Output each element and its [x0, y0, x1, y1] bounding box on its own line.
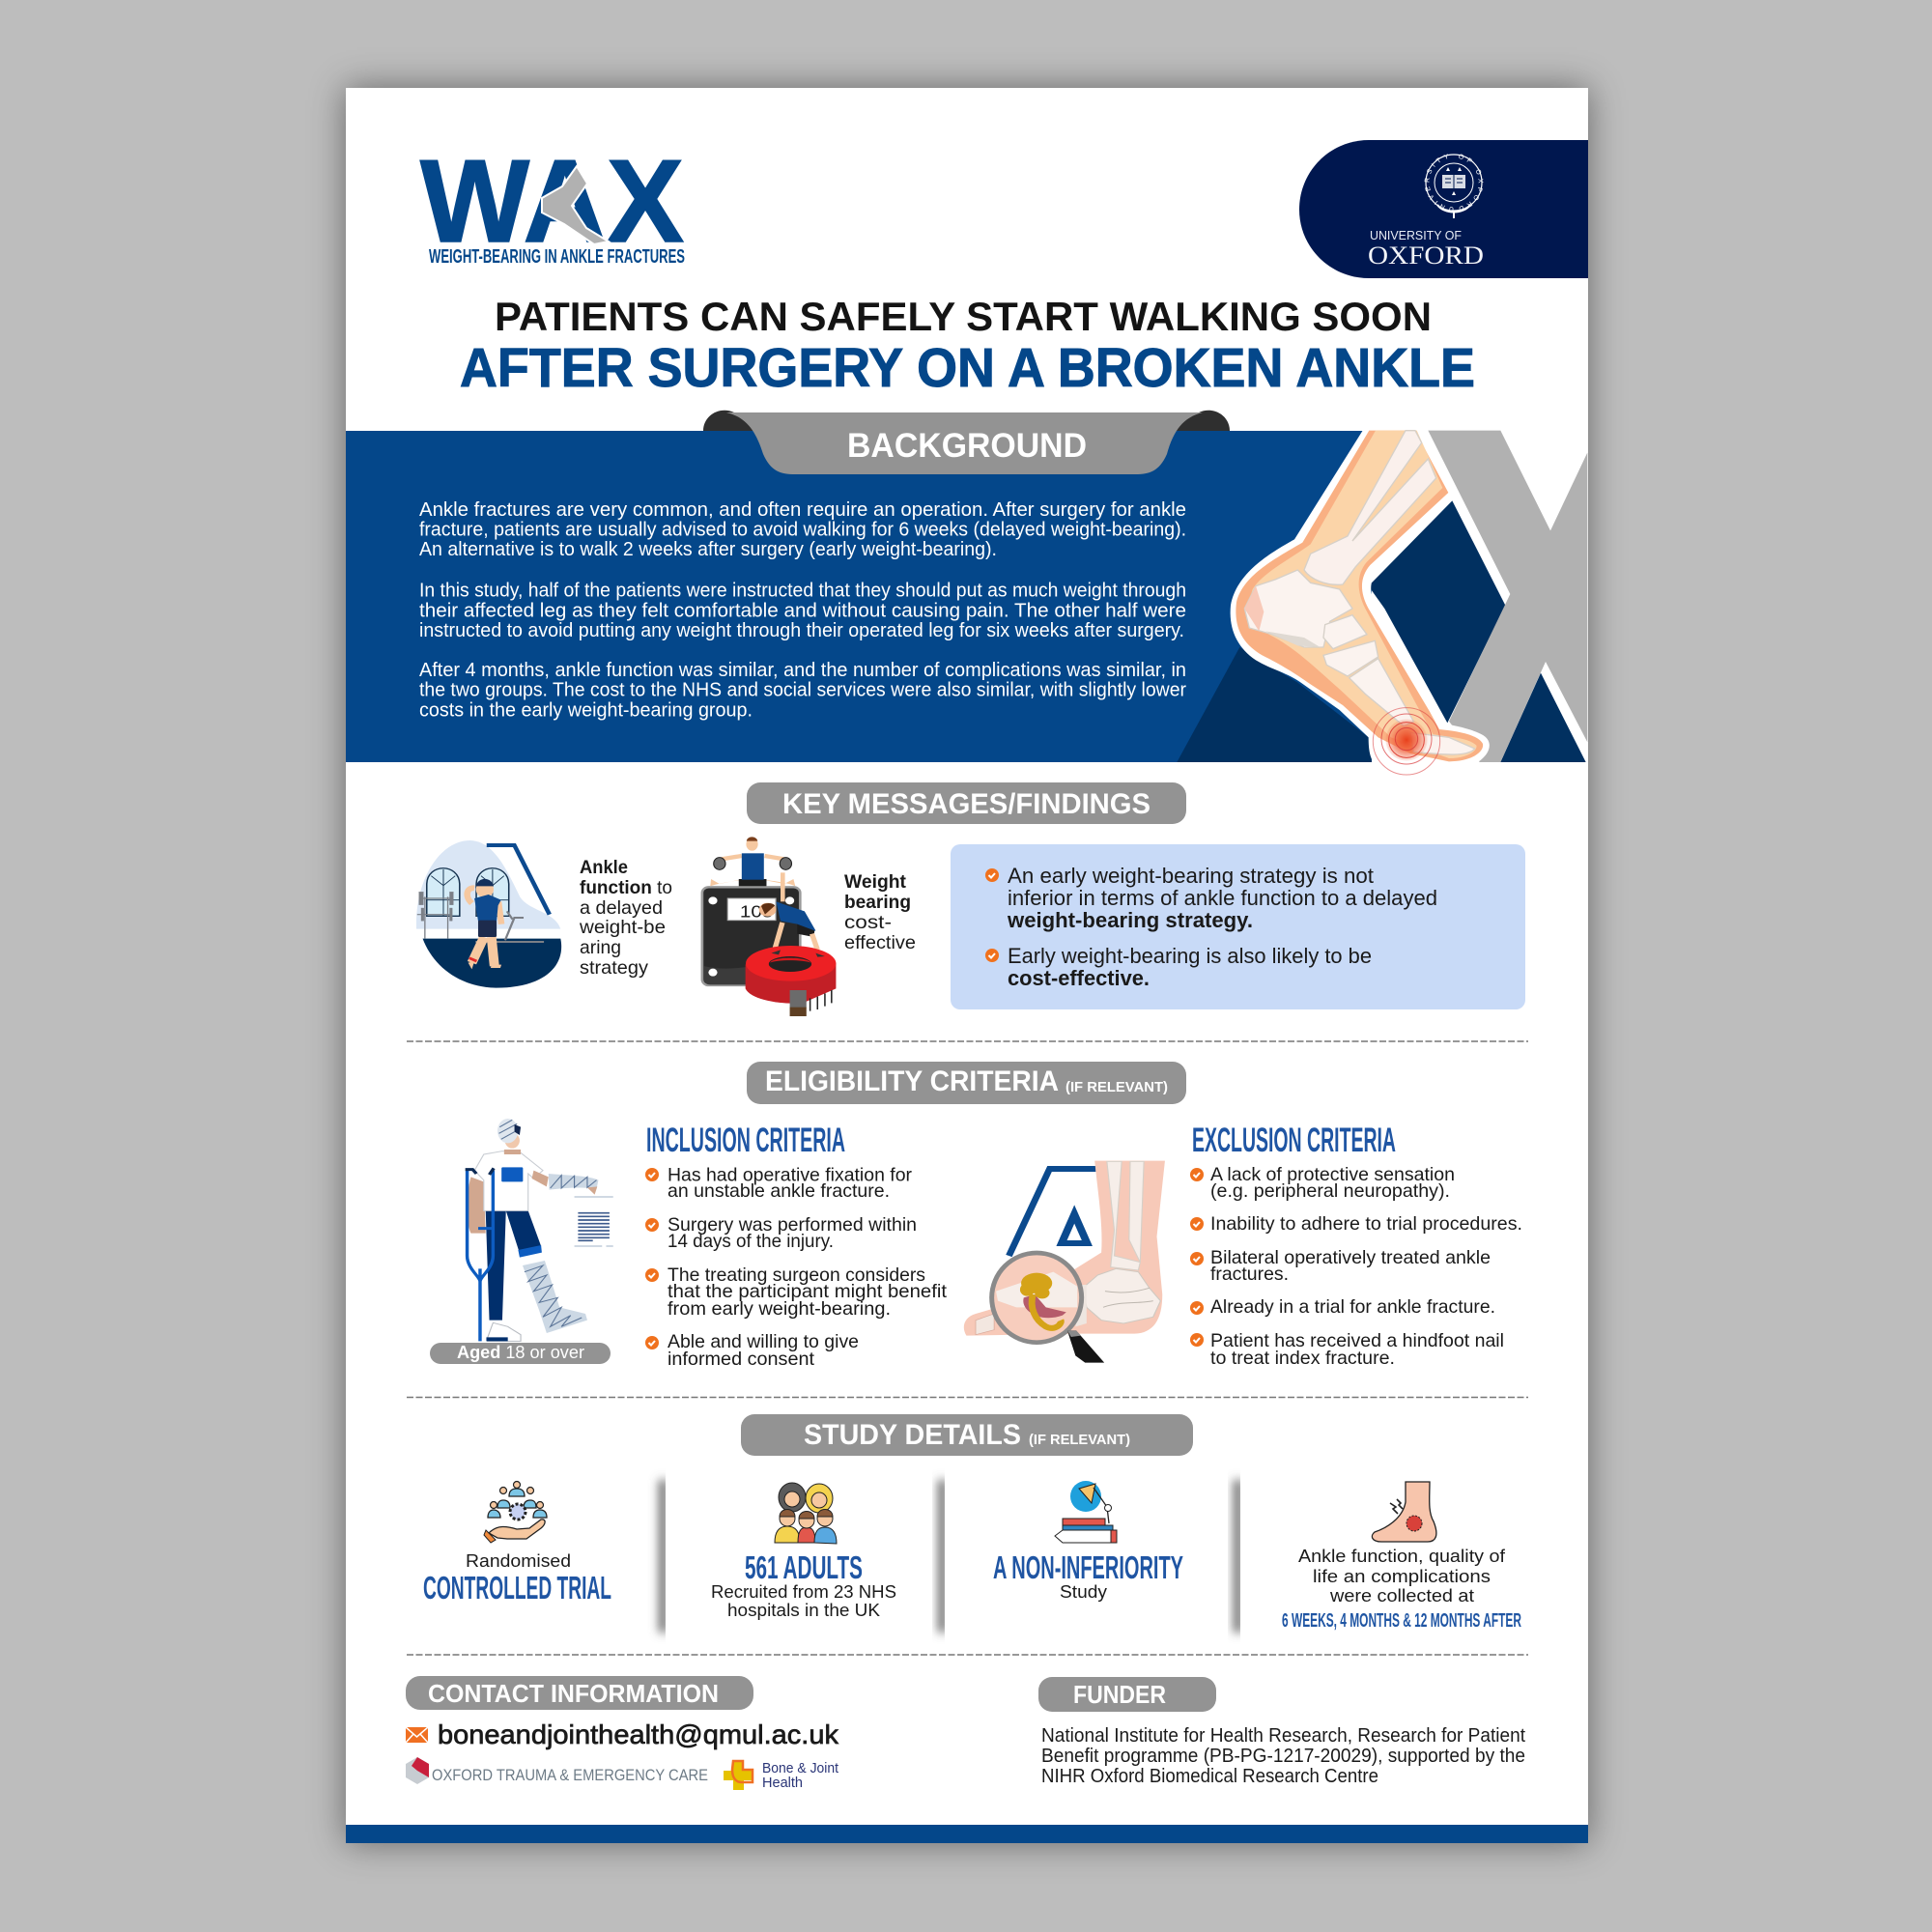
- text: email: boneandjointhealth@qmul.ac.uk: [438, 1719, 839, 1749]
- list: inclusion criteria: [645, 1165, 948, 1370]
- text: recruited: [711, 1582, 896, 1620]
- illustration: man in gym: [416, 840, 561, 988]
- blue band: [346, 431, 1372, 762]
- panel: key messages: [416, 782, 1525, 1016]
- label: aged 18 or over: Aged 18 or over: [457, 1342, 584, 1362]
- panel: study details: [423, 1414, 1530, 1652]
- list: exclusion criteria: [1190, 1164, 1522, 1369]
- list: exclusion criteria: Patient has received a hindfoot nail: [1210, 1330, 1504, 1351]
- foot inner tissue: [1250, 431, 1477, 758]
- title line 2: AFTER SURGERY ON A BROKEN ANKLE: [460, 337, 1475, 399]
- icon: foot bones: [542, 166, 609, 244]
- list: inclusion criteria: 14 days of the injury.: [668, 1231, 834, 1252]
- logo: Bone & Joint Health: [724, 1761, 838, 1791]
- logo: Oxford Trauma: OXFORD TRAUMA & EMERGENCY CARE: [432, 1766, 708, 1784]
- funder heading: FUNDER: [1073, 1680, 1166, 1709]
- list: exclusion criteria: fractures.: [1210, 1264, 1289, 1285]
- text: ankle function outcomes: were collected at: [1329, 1586, 1474, 1605]
- text: ankle function: [579, 857, 672, 979]
- text: a non-inferiority: A NON-INFERIORITY: [993, 1549, 1183, 1585]
- navy shapes: [1177, 500, 1586, 762]
- text: recruited: hospitals in the UK: [727, 1601, 880, 1620]
- illustration: scale and tape: [702, 837, 836, 1016]
- funder text: Benefit programme (PB-PG-1217-20029), supported by the: [1041, 1746, 1525, 1767]
- panel: funder: [1038, 1677, 1525, 1787]
- funder text: National Institute for Health Research, Research for Patient: [1041, 1725, 1525, 1747]
- list: exclusion criteria: A lack of protective sensation: [1210, 1164, 1455, 1185]
- foot white outline: [1231, 431, 1490, 762]
- finding 2: [1008, 944, 1372, 990]
- leg bones: [1304, 431, 1436, 584]
- callout: key findings: [951, 844, 1525, 1009]
- logo: Bone & Joint Health: Health: [762, 1776, 803, 1791]
- icon: group of adults: [775, 1483, 837, 1544]
- list: exclusion criteria: Bilateral operatively treated ankle: [1210, 1247, 1491, 1268]
- bullet icon: [985, 949, 999, 962]
- heading text: BACKGROUND: [847, 427, 1087, 465]
- finding 1: An early weight-bearing strategy is not: [1008, 864, 1375, 888]
- text: ankle function outcomes: Ankle function, quality of: [1298, 1547, 1506, 1566]
- list: exclusion criteria: Already in a trial for ankle fracture.: [1210, 1296, 1495, 1318]
- funder heading: [1038, 1677, 1216, 1712]
- logo letters: WAX: [420, 135, 684, 267]
- text: randomised: Randomised: [466, 1551, 571, 1571]
- list: inclusion criteria: The treating surgeon considers: [668, 1264, 925, 1286]
- contact heading: CONTACT INFORMATION: [428, 1679, 719, 1708]
- logo subtitle: WEIGHT-BEARING IN ANKLE FRACTURES: [429, 245, 685, 268]
- background text: costs in the early weight-bearing group.: [419, 699, 753, 721]
- University of Oxford badge: [1299, 140, 1588, 278]
- ribbon: background heading: [703, 411, 1230, 474]
- heading: inclusion criteria: INCLUSION CRITERIA: [646, 1122, 845, 1159]
- icon: books and lamp: [1055, 1481, 1117, 1543]
- finding 1: [1007, 864, 1437, 932]
- text: ankle function: aring: [580, 937, 621, 958]
- header logo: WAX: [420, 135, 685, 268]
- text: weight bearing: Weight: [844, 871, 906, 893]
- study details heading: (IF RELEVANT): [1029, 1432, 1130, 1448]
- text: ankle function: weight-be: [579, 917, 666, 938]
- pain rings: [1373, 708, 1440, 775]
- text: 561 adults: 561 ADULTS: [745, 1549, 863, 1585]
- text: ankle function outcomes: life an complications: [1313, 1567, 1491, 1586]
- background text: An alternative is to walk 2 weeks after surgery (early weight-bearing).: [419, 539, 997, 560]
- ribbon folds: [703, 411, 1230, 431]
- icon: Oxford seal: UNIVERSITY OF OXFORD: [1424, 154, 1484, 211]
- eligibility heading: ELIGIBILITY CRITERIA: [765, 1065, 1059, 1097]
- funder text: [1041, 1725, 1525, 1787]
- footer bar: [346, 1825, 1588, 1843]
- background text: instructed to avoid putting any weight through their operated leg for six weeks after surgery.: [419, 620, 1184, 641]
- logo: Oxford Trauma: [406, 1757, 708, 1784]
- finding 2: Early weight-bearing is also likely to be: [1008, 944, 1372, 968]
- text: weight bearing: [844, 871, 916, 953]
- background text: [419, 499, 1186, 721]
- text: ankle function outcomes: [1298, 1547, 1506, 1605]
- key messages heading: KEY MESSAGES/FINDINGS: [782, 788, 1151, 820]
- list: exclusion criteria: to treat index fracture.: [1210, 1348, 1395, 1369]
- column: participants: [711, 1483, 896, 1620]
- key messages heading: [747, 782, 1186, 824]
- list: exclusion criteria: Inability to adhere to trial procedures.: [1210, 1213, 1522, 1235]
- paper sheet: [346, 88, 1588, 1843]
- finding 1: weight-bearing strategy.: [1007, 908, 1253, 932]
- text: ankle function: a delayed: [580, 897, 663, 919]
- background text: In this study, half of the patients were instructed that they should put as much weight through: [419, 580, 1186, 601]
- panel: contact information: [406, 1676, 839, 1791]
- logo: Bone & Joint Health: Bone & Joint: [762, 1761, 838, 1776]
- list: inclusion criteria: informed consent: [668, 1349, 815, 1370]
- panel: background: [346, 411, 1587, 775]
- column: trial design: [423, 1482, 611, 1605]
- background text: fracture, patients are usually advised to avoid walking for 6 weeks (delayed weight-bearing).: [419, 520, 1186, 541]
- illustration: foot under magnifier: [964, 1161, 1165, 1363]
- text: controlled trial: CONTROLLED TRIAL: [423, 1570, 611, 1605]
- text: ankle function: strategy: [580, 957, 648, 979]
- foot outer tissue: [1236, 431, 1483, 761]
- eligibility heading: [747, 1062, 1186, 1104]
- study details heading: [741, 1414, 1193, 1456]
- finding 2: cost-effective.: [1008, 966, 1150, 990]
- background text: their affected leg as they felt comfortable and without causing pain. The other half were: [419, 601, 1186, 622]
- list: exclusion criteria: (e.g. peripheral neuropathy).: [1210, 1180, 1450, 1202]
- column: outcomes: [1282, 1482, 1521, 1632]
- ribbon body: [726, 412, 1203, 474]
- finding 1: inferior in terms of ankle function to a delayed: [1008, 886, 1437, 910]
- grey X: [1428, 431, 1587, 762]
- column: study type: [993, 1481, 1183, 1602]
- icon: team and gear: [484, 1482, 547, 1543]
- graphic: X shape and ankle: [1177, 431, 1587, 775]
- bullet icon: [985, 868, 999, 882]
- background text: After 4 months, ankle function was similar, and the number of complications was similar, in: [419, 660, 1186, 681]
- eligibility heading: (IF RELEVANT): [1065, 1079, 1168, 1095]
- list: inclusion criteria: from early weight-bearing.: [668, 1298, 891, 1320]
- title line 1: PATIENTS CAN SAFELY START WALKING SOON: [495, 294, 1432, 339]
- funder text: NIHR Oxford Biomedical Research Centre: [1041, 1766, 1378, 1787]
- badge background: [1299, 140, 1588, 278]
- background text: the two groups. The cost to the NHS and social services were also similar, with slightly lower: [419, 680, 1186, 701]
- text: ankle function: function to: [580, 877, 672, 898]
- title: [460, 294, 1475, 399]
- text: recruited: Recruited from 23 NHS: [711, 1582, 896, 1602]
- list: inclusion criteria: that the participant might benefit: [668, 1281, 948, 1302]
- illustration: scale and tape: 105: [740, 902, 773, 922]
- icon: envelope: [406, 1727, 428, 1743]
- illustration: patient on crutches: [466, 1119, 613, 1341]
- list: inclusion criteria: Able and willing to give: [668, 1331, 859, 1352]
- text: University of: UNIVERSITY OF: [1370, 228, 1462, 242]
- list: inclusion criteria: an unstable ankle fracture.: [668, 1180, 890, 1202]
- heel and tarsal bones: [1244, 570, 1352, 647]
- list: inclusion criteria: Surgery was performed within: [668, 1214, 917, 1236]
- background text: Ankle fractures are very common, and often require an operation. After surgery for ankle: [419, 499, 1186, 521]
- text: Oxford: OXFORD: [1368, 242, 1484, 270]
- list: inclusion criteria: Has had operative fixation for: [668, 1165, 912, 1186]
- text: time points: 6 WEEKS, 4 MONTHS & 12 MONTHS AFTER: [1282, 1610, 1521, 1632]
- text: weight bearing: bearing: [844, 892, 911, 913]
- text: study: Study: [1060, 1582, 1107, 1602]
- study details heading: STUDY DETAILS: [804, 1419, 1021, 1451]
- panel: eligibility criteria: [430, 1062, 1522, 1370]
- text: ankle function: Ankle: [580, 857, 628, 878]
- label: aged 18 or over: [430, 1342, 611, 1364]
- heading: exclusion criteria: EXCLUSION CRITERIA: [1192, 1122, 1396, 1159]
- icon: painful foot: [1372, 1482, 1436, 1542]
- text: weight bearing: cost-: [844, 912, 892, 933]
- text: weight bearing: effective: [844, 932, 916, 953]
